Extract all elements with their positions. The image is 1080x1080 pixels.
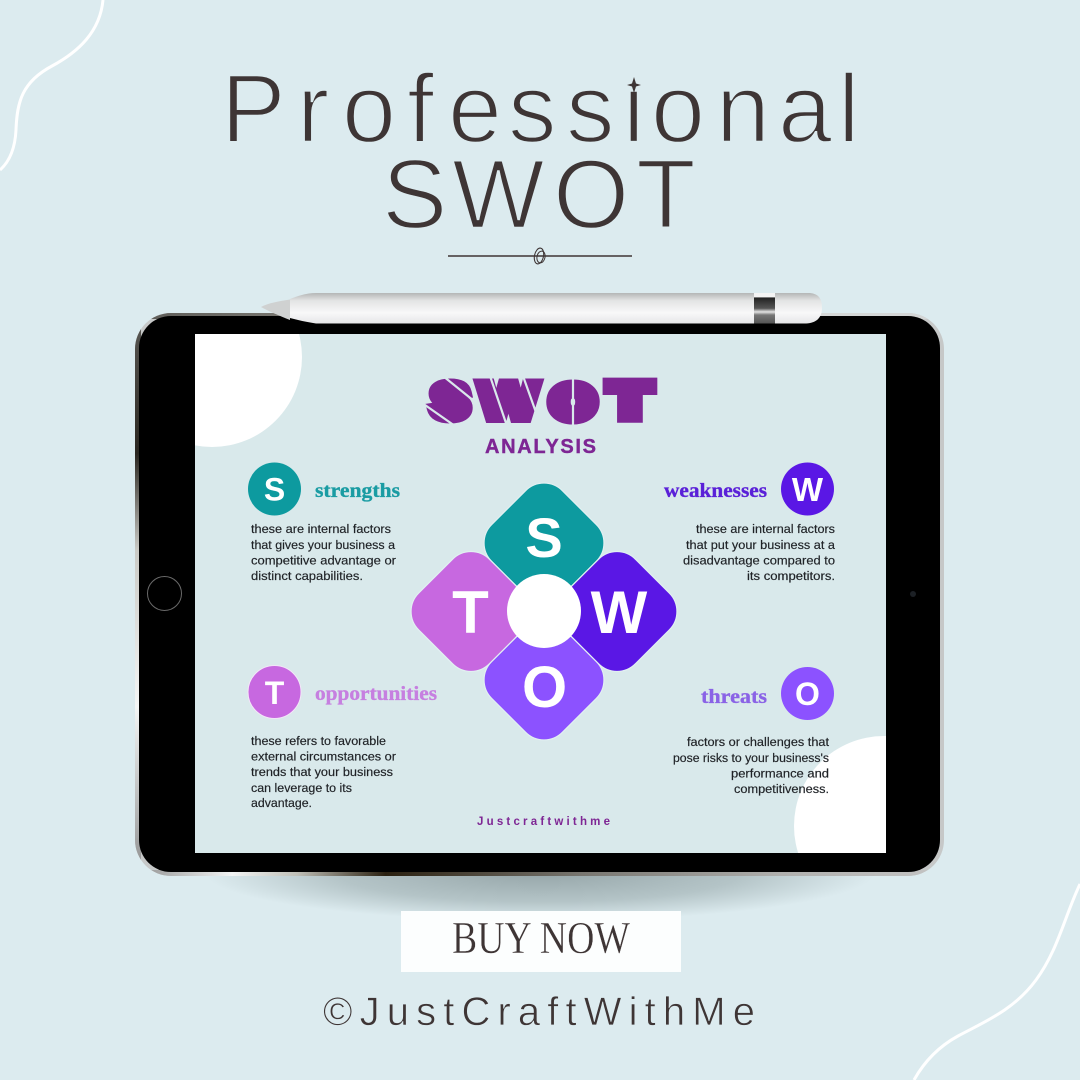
tablet black bezel bbox=[139, 316, 940, 872]
threats block bbox=[673, 667, 834, 796]
opportunities text: external circumstances or bbox=[251, 750, 396, 764]
opportunities heading: opportunities bbox=[315, 683, 437, 705]
diamond S: S bbox=[525, 506, 563, 569]
weaknesses text: these are internal factors bbox=[696, 522, 835, 536]
diamond O bbox=[473, 609, 615, 751]
diamond O: O bbox=[522, 655, 567, 720]
opportunities block bbox=[248, 666, 437, 810]
diamond T bbox=[400, 541, 542, 682]
strengths text: that gives your business a bbox=[251, 538, 395, 552]
threats heading: threats bbox=[701, 686, 767, 708]
weaknesses block bbox=[664, 462, 835, 583]
strengths text: competitive advantage or bbox=[251, 554, 396, 568]
opportunities text: these refers to favorable bbox=[251, 734, 386, 748]
threats text bbox=[673, 735, 830, 796]
strengths text bbox=[251, 522, 396, 583]
swot logo heading: W bbox=[480, 373, 538, 429]
badge W: W bbox=[792, 471, 824, 508]
opportunities text: can leverage to its bbox=[251, 781, 352, 795]
weaknesses text bbox=[683, 522, 835, 583]
screen brand line: Justcraftwithme bbox=[477, 816, 610, 828]
opportunities text: advantage. bbox=[251, 796, 312, 810]
strengths heading: strengths bbox=[315, 480, 400, 502]
diamond T: T bbox=[452, 579, 489, 646]
tablet screen bbox=[195, 334, 886, 853]
decorative squiggle top left bbox=[0, 0, 103, 170]
badge T: T bbox=[265, 675, 285, 711]
centre circle bbox=[507, 574, 581, 648]
tablet device bbox=[135, 313, 944, 876]
threats text: performance and bbox=[731, 766, 829, 780]
home button bbox=[148, 576, 182, 610]
opportunities text bbox=[251, 734, 396, 810]
badge O bbox=[781, 667, 834, 720]
weaknesses text: its competitors. bbox=[747, 569, 835, 583]
strengths block bbox=[248, 462, 400, 583]
threats text: pose risks to your business's bbox=[673, 751, 829, 765]
weaknesses text: disadvantage compared to bbox=[683, 554, 835, 568]
buy now button bbox=[401, 911, 681, 972]
badge O: O bbox=[795, 676, 820, 712]
tablet metal frame bbox=[135, 313, 944, 876]
badge T bbox=[248, 666, 301, 718]
buy now button: BUY NOW bbox=[452, 912, 630, 963]
weaknesses text: that put your business at a bbox=[686, 538, 835, 552]
diamond W: W bbox=[591, 579, 648, 646]
analysis subheading: ANALYSIS bbox=[485, 436, 596, 458]
swot logo heading: S bbox=[432, 375, 468, 427]
swot logo heading: O bbox=[552, 378, 594, 427]
threats text: competitiveness. bbox=[734, 782, 829, 796]
title line two: SWOT bbox=[382, 139, 696, 249]
diamond S bbox=[473, 472, 615, 614]
threats text: factors or challenges that bbox=[687, 735, 830, 749]
weaknesses heading: weaknesses bbox=[664, 480, 767, 502]
diamond W bbox=[546, 541, 688, 682]
badge W bbox=[781, 462, 834, 516]
copyright line: ©JustCraftWithMe bbox=[323, 990, 755, 1034]
screen corner circles bbox=[195, 334, 886, 853]
tablet shadow bbox=[205, 825, 875, 921]
title divider ornament bbox=[448, 247, 632, 265]
stylus pencil bbox=[261, 293, 822, 324]
badge S: S bbox=[264, 472, 285, 508]
strengths text: distinct capabilities. bbox=[251, 569, 363, 583]
decorative squiggle bottom right bbox=[914, 884, 1080, 1080]
opportunities text: trends that your business bbox=[251, 765, 393, 779]
swot logo heading bbox=[425, 373, 650, 429]
camera bbox=[910, 591, 916, 597]
strengths text: these are internal factors bbox=[251, 522, 391, 536]
swot diamond diagram bbox=[400, 472, 688, 751]
swot logo heading: T bbox=[610, 374, 650, 428]
title line one: Professional bbox=[221, 54, 860, 163]
badge S bbox=[248, 462, 301, 516]
